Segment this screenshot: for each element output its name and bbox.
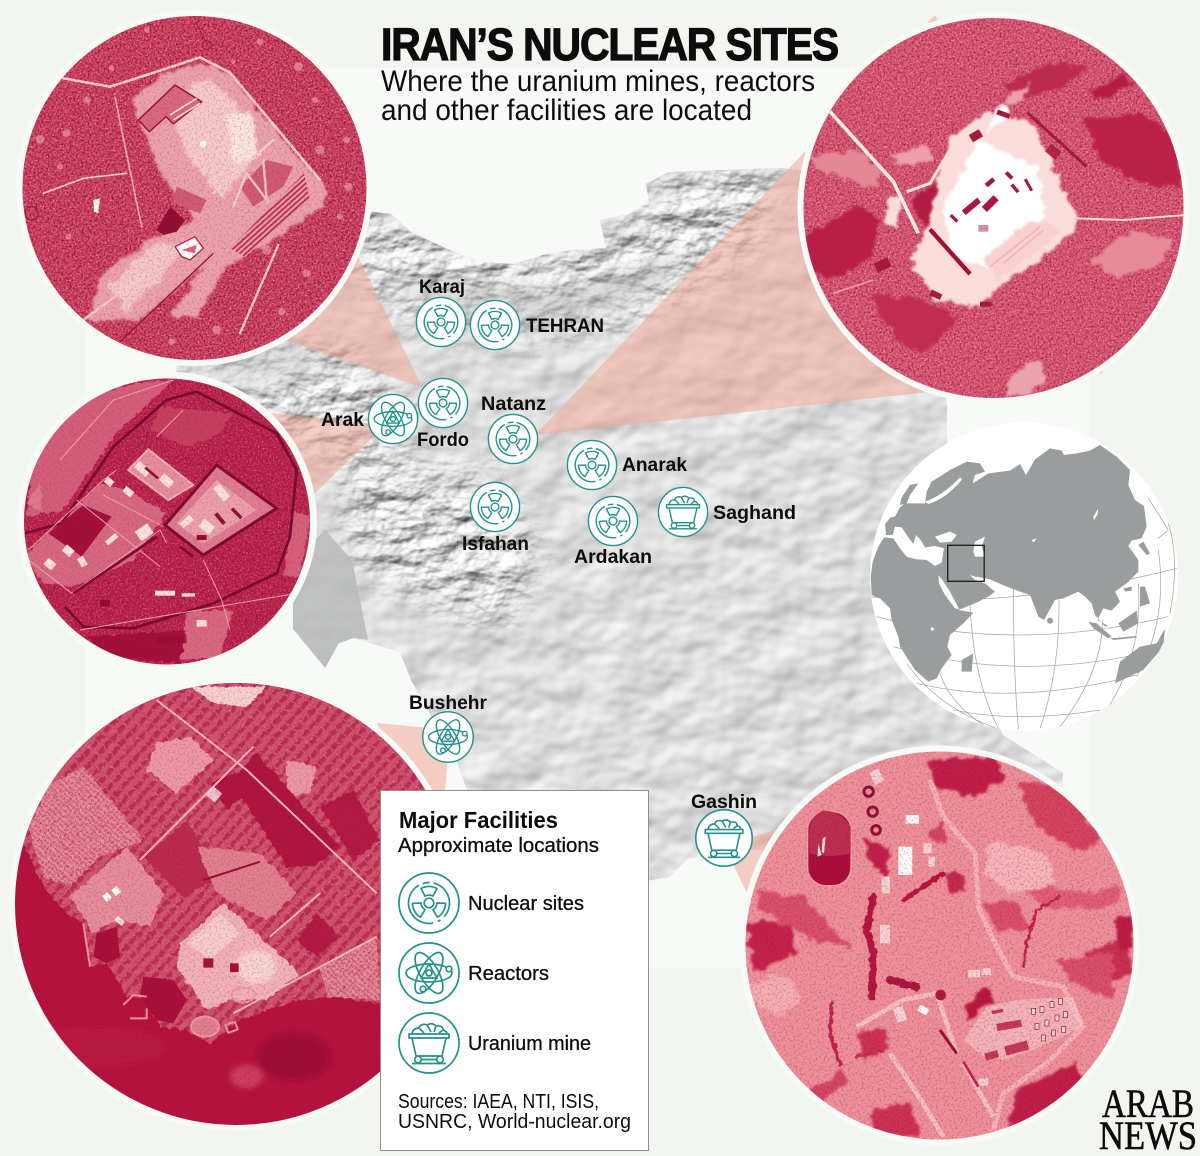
subtitle: and other facilities are located (381, 94, 752, 127)
marker: Tehran: TEHRAN (526, 315, 604, 337)
wedge: Fordo to top-left photo (270, 240, 423, 388)
legend item: uranium mine: Uranium mine (468, 1033, 591, 1055)
wedge: Bushehr to bottom-left photo (377, 723, 450, 792)
legend item: reactors (399, 943, 549, 1003)
satellite photo: Bushehr (0, 677, 467, 1131)
title: IRAN’S NUCLEAR SITES (381, 19, 838, 70)
marker: Karaj: Karaj (419, 276, 465, 298)
sources (398, 1091, 631, 1133)
globe locator box (948, 545, 984, 581)
satellite photo: Fordo (16, 10, 372, 366)
marker: Isfahan: Isfahan (462, 533, 529, 555)
marker: Bushehr: Bushehr (409, 692, 487, 714)
marker: Saghand: Saghand (713, 502, 796, 524)
legend item: reactors: Reactors (468, 963, 549, 985)
marker: Fordo: Fordo (417, 429, 469, 451)
satellite photo: Natanz (798, 12, 1190, 405)
legend heading (398, 807, 599, 857)
marker: Natanz: Natanz (481, 393, 546, 415)
globe graticule (870, 498, 1177, 729)
marker: Natanz (481, 393, 546, 464)
marker: Ardakan: Ardakan (574, 546, 652, 568)
globe land (871, 445, 1165, 683)
marker: Saghand (658, 487, 796, 537)
satellite photo: Gashin (740, 745, 1140, 1146)
marker: Gashin: Gashin (691, 791, 757, 813)
marker: Gashin (691, 791, 757, 866)
legend panel (380, 790, 648, 1150)
marker: Bushehr (409, 692, 487, 762)
legend heading: Approximate locations (398, 835, 599, 857)
sources: USNRC, World-nuclear.org (398, 1111, 631, 1133)
marker: Anarak (567, 440, 687, 490)
globe inland seas (925, 477, 1098, 631)
marker: Tehran (470, 300, 604, 350)
marker: Arak: Arak (321, 409, 364, 431)
legend heading: Major Facilities (399, 807, 558, 833)
satellite photo: Arak (17, 372, 317, 672)
marker: Ardakan (574, 496, 652, 568)
locator globe (870, 422, 1178, 730)
logo: Arab News (1099, 1081, 1197, 1156)
sources: Sources: IAEA, NTI, ISIS, (398, 1091, 599, 1113)
wedge: Gashin to bottom-right photo (724, 830, 775, 900)
wedge: Natanz to top-right photo (535, 15, 1103, 435)
subtitle: Where the uranium mines, reactors (381, 65, 815, 98)
marker: Anarak: Anarak (622, 454, 687, 476)
subtitle (381, 65, 815, 127)
marker: Karaj (416, 276, 466, 347)
marker: Isfahan (462, 482, 529, 555)
legend item: nuclear sites: Nuclear sites (468, 893, 584, 915)
legend item: uranium mine (399, 1013, 591, 1073)
wedge: Arak to left photo (270, 413, 385, 498)
marker: Fordo (417, 378, 469, 451)
map: Iran relief (170, 160, 1070, 890)
legend item: nuclear sites (399, 873, 584, 933)
marker: Arak (321, 394, 418, 444)
